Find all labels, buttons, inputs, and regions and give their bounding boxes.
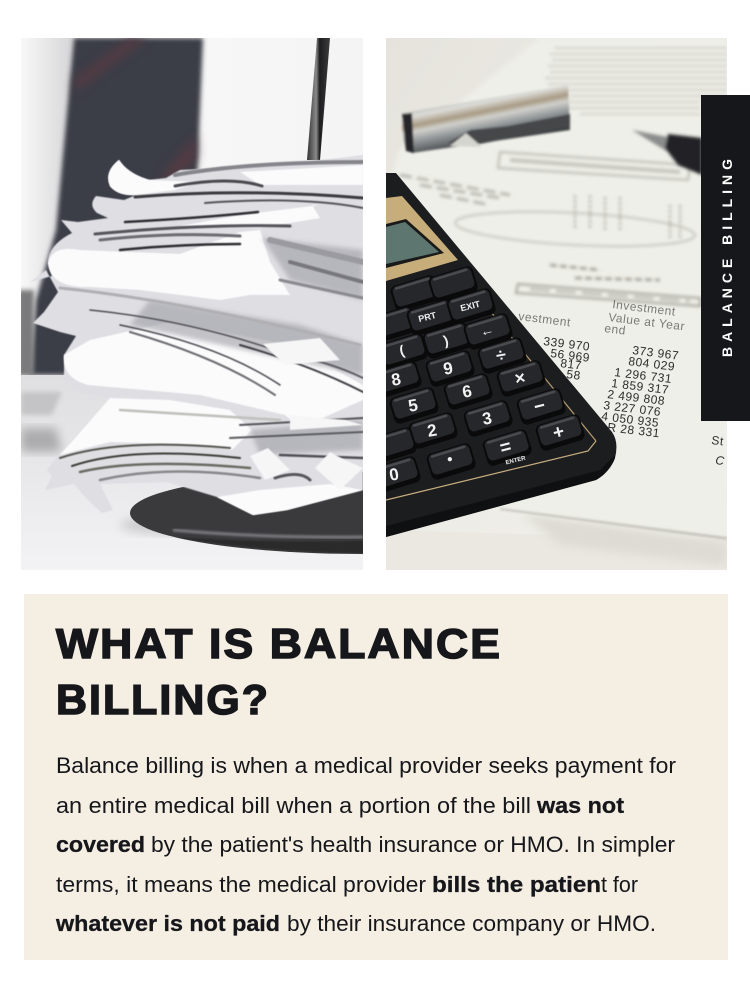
bright sheets [48, 160, 363, 515]
statement figures: 339 970 [543, 334, 591, 354]
statement figures: 56 969 [550, 346, 591, 365]
definition text: bills the patien [432, 872, 601, 897]
key labels: 0 [388, 464, 400, 485]
key labels: = [498, 436, 514, 459]
LCD display [386, 219, 444, 268]
gold display surround [386, 196, 458, 281]
statement figures: 1 859 317 [611, 376, 670, 397]
statement figures: Value at Year [608, 310, 686, 333]
definition text: by their insurance company or HMO. [287, 911, 656, 936]
statement figures: vestment [518, 309, 572, 329]
statement figures: C [715, 453, 725, 468]
pen nib and barrel [632, 130, 702, 175]
heading: BILLING? [56, 676, 270, 723]
photo: calculator on financial statement [366, 38, 727, 570]
pen cap [402, 85, 570, 153]
heading: WHAT IS BALANCE [56, 620, 502, 667]
definition text: an entire medical bill when a portion of the bill [56, 793, 531, 818]
key labels: 6 [461, 381, 473, 402]
statement paper [394, 41, 552, 222]
key labels: × [513, 367, 527, 389]
calculator body [386, 173, 616, 537]
key labels: ) [442, 332, 450, 348]
calculator lower bezel [386, 455, 615, 538]
key labels: ( [398, 342, 406, 358]
definition text: Balance billing is when a medical provider seeks payment for [56, 753, 677, 778]
paper silhouette [30, 155, 363, 515]
photo: stack of papers on a spike [21, 38, 363, 570]
statement figures: 817 [560, 356, 583, 373]
side tab: balance billing [701, 95, 750, 421]
calculator keys [386, 266, 584, 492]
definition text: terms, it means the medical provider [56, 872, 427, 897]
statement figures: end [604, 321, 627, 338]
definition text: covered [56, 832, 145, 857]
definition text: by the patient's health insurance or HMO. In simpler [151, 832, 676, 857]
definition text: t for [601, 872, 638, 897]
statement figures: R 28 331 [607, 420, 661, 440]
side tab: balance billing: BALANCE BILLING [719, 159, 735, 357]
lower desk [570, 555, 727, 570]
key labels: 8 [390, 369, 402, 390]
blurred dark necktie backdrop [30, 38, 203, 375]
key labels: 5 [407, 395, 419, 416]
statement figures: 3 227 076 [603, 398, 662, 419]
definition text [55, 753, 677, 936]
statement figures: 1 296 731 [614, 365, 673, 386]
folded paper corners [250, 338, 363, 490]
key labels: − [532, 395, 548, 418]
statement figures: 2 499 808 [607, 387, 666, 408]
definition text: whatever is not paid [55, 911, 280, 936]
statement figures: St [711, 433, 725, 449]
shaded sheets and dark paper edges [60, 162, 363, 480]
key labels: ← [478, 321, 496, 340]
key labels: 3 [481, 408, 493, 429]
key labels: + [551, 421, 567, 444]
statement figures: 58 [566, 367, 582, 383]
gray shading on the right of the stack [130, 238, 363, 455]
key labels: PRT [417, 310, 438, 324]
key labels: EXIT [459, 299, 482, 313]
desk surface [21, 375, 160, 570]
blurred printed text [545, 48, 727, 114]
key labels: 2 [426, 420, 438, 441]
statement figures: 4 050 935 [601, 409, 660, 430]
definition text: was not [536, 793, 625, 818]
panel: what is balance billing [24, 594, 728, 960]
spike rod [307, 38, 330, 160]
statement figures [518, 297, 725, 468]
base disc [130, 472, 363, 554]
key labels: 9 [442, 358, 454, 379]
key labels [388, 299, 567, 485]
key labels: ENTER [505, 455, 527, 466]
key labels: ÷ [494, 344, 508, 366]
key labels: • [445, 451, 455, 469]
statement figures: Investment [612, 297, 677, 319]
statement figures: 373 967 [632, 343, 680, 363]
statement figures: 804 029 [628, 354, 676, 374]
heading [56, 620, 502, 723]
